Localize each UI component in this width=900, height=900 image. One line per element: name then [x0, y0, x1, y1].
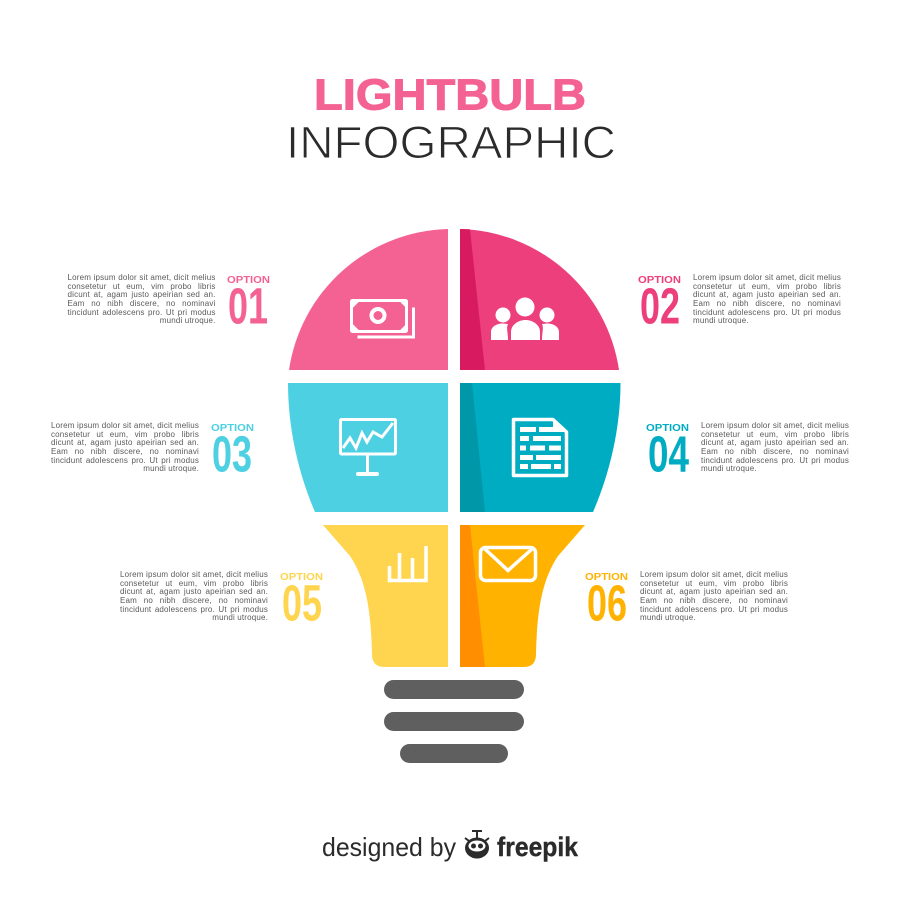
- text block: option 06: Lorem ipsum dolor sit amet, dicit melius: [640, 570, 788, 579]
- text block: option 03: tincidunt adolescens pro. Ut pri modus: [51, 456, 199, 465]
- panel: option 05 bulb section: [323, 525, 448, 667]
- text block: option 06: Eam no nibh discere, no nominavi: [640, 596, 788, 605]
- lightbulb base bars: [384, 680, 524, 763]
- text block: option 05: tincidunt adolescens pro. Ut pri modus: [120, 605, 268, 614]
- panel: option 06 bulb section: [460, 525, 585, 667]
- text block: option 06: mundi utroque.: [640, 613, 696, 622]
- option 05 label: OPTION: [280, 571, 323, 583]
- text block: option 04: mundi utroque.: [701, 464, 757, 473]
- title: LIGHTBULB: [314, 70, 586, 120]
- title: INFOGRAPHIC: [286, 117, 616, 168]
- icon: presentation board: [340, 420, 396, 474]
- text block: option 03: mundi utroque.: [143, 464, 199, 473]
- text block: option 04: Lorem ipsum dolor sit amet, dicit melius: [701, 421, 849, 430]
- text block: option 03: [51, 421, 199, 473]
- text block: option 02: consetetur ut eum, vim probo libris: [693, 282, 841, 291]
- text block: option 01: tincidunt adolescens pro. Ut pri modus: [68, 308, 216, 317]
- icon: banknotes: [352, 300, 414, 337]
- text block: option 05: consetetur ut eum, vim probo libris: [120, 579, 268, 588]
- text block: option 05: mundi utroque.: [212, 613, 268, 622]
- text block: option 04: dicunt at, agam justo apeirian sed an.: [701, 438, 849, 447]
- option 01 label: OPTION: [227, 274, 270, 286]
- text block: option 01: Eam no nibh discere, no nominavi: [68, 299, 216, 308]
- footer credit: freepik: [497, 832, 579, 862]
- text block: option 01: consetetur ut eum, vim probo libris: [68, 282, 216, 291]
- text block: option 02: tincidunt adolescens pro. Ut pri modus: [693, 308, 841, 317]
- panel: option 04 bulb section: [460, 383, 620, 512]
- option 05 label: 05: [282, 574, 322, 632]
- footer credit: [322, 831, 579, 862]
- text block: option 03: dicunt at, agam justo apeirian sed an.: [51, 438, 199, 447]
- option 04 label: 04: [648, 426, 689, 482]
- option 02 label: 02: [640, 278, 680, 334]
- option 03 label: [211, 422, 254, 482]
- text block: option 05: Lorem ipsum dolor sit amet, dicit melius: [120, 570, 268, 579]
- option 02 label: [638, 274, 681, 334]
- option 06 label: OPTION: [585, 571, 628, 583]
- option 05 label: [280, 571, 323, 632]
- text block: option 06: [640, 570, 788, 622]
- option 04 label: OPTION: [646, 422, 689, 434]
- panel: option 01 bulb section: [289, 229, 448, 370]
- text block: option 02: Lorem ipsum dolor sit amet, dicit melius: [693, 273, 841, 282]
- text block: option 06: consetetur ut eum, vim probo libris: [640, 579, 788, 588]
- option 04 label: [646, 422, 689, 482]
- text block: option 06: tincidunt adolescens pro. Ut pri modus: [640, 605, 788, 614]
- text block: option 04: tincidunt adolescens pro. Ut pri modus: [701, 456, 849, 465]
- text block: option 02: [693, 273, 841, 325]
- text block: option 05: [120, 570, 268, 622]
- option 02 label: OPTION: [638, 274, 681, 286]
- text block: option 03: consetetur ut eum, vim probo libris: [51, 430, 199, 439]
- option 01 label: 01: [228, 278, 268, 334]
- icon: people: [491, 298, 559, 340]
- option 03 label: 03: [212, 426, 252, 482]
- text block: option 05: Eam no nibh discere, no nominavi: [120, 596, 268, 605]
- text block: option 04: [701, 421, 849, 473]
- text block: option 01: [68, 273, 216, 325]
- icon: bar chart: [390, 546, 426, 580]
- text block: option 02: Eam no nibh discere, no nominavi: [693, 299, 841, 308]
- text block: option 04: consetetur ut eum, vim probo libris: [701, 430, 849, 439]
- option 06 label: [585, 571, 628, 632]
- icon: document: [514, 420, 566, 476]
- title: [286, 70, 616, 168]
- text block: option 06: dicunt at, agam justo apeirian sed an.: [640, 587, 788, 596]
- text block: option 01: mundi utroque.: [160, 316, 216, 325]
- text block: option 01: dicunt at, agam justo apeirian sed an.: [68, 290, 216, 299]
- panel: option 03 bulb section: [288, 383, 448, 512]
- footer credit: designed by: [322, 832, 456, 862]
- text block: option 03: Lorem ipsum dolor sit amet, dicit melius: [51, 421, 199, 430]
- text block: option 04: Eam no nibh discere, no nominavi: [701, 447, 849, 456]
- option 03 label: OPTION: [211, 422, 254, 434]
- panel: option 02 bulb section: [460, 229, 619, 370]
- text block: option 05: dicunt at, agam justo apeirian sed an.: [120, 587, 268, 596]
- icon: freepik logo: [465, 831, 489, 858]
- text block: option 03: Eam no nibh discere, no nominavi: [51, 447, 199, 456]
- option 06 label: 06: [587, 574, 627, 632]
- text block: option 01: Lorem ipsum dolor sit amet, dicit melius: [68, 273, 216, 282]
- option 01 label: [227, 274, 270, 334]
- text block: option 02: mundi utroque.: [693, 316, 749, 325]
- icon: envelope: [480, 548, 536, 580]
- text block: option 02: dicunt at, agam justo apeirian sed an.: [693, 290, 841, 299]
